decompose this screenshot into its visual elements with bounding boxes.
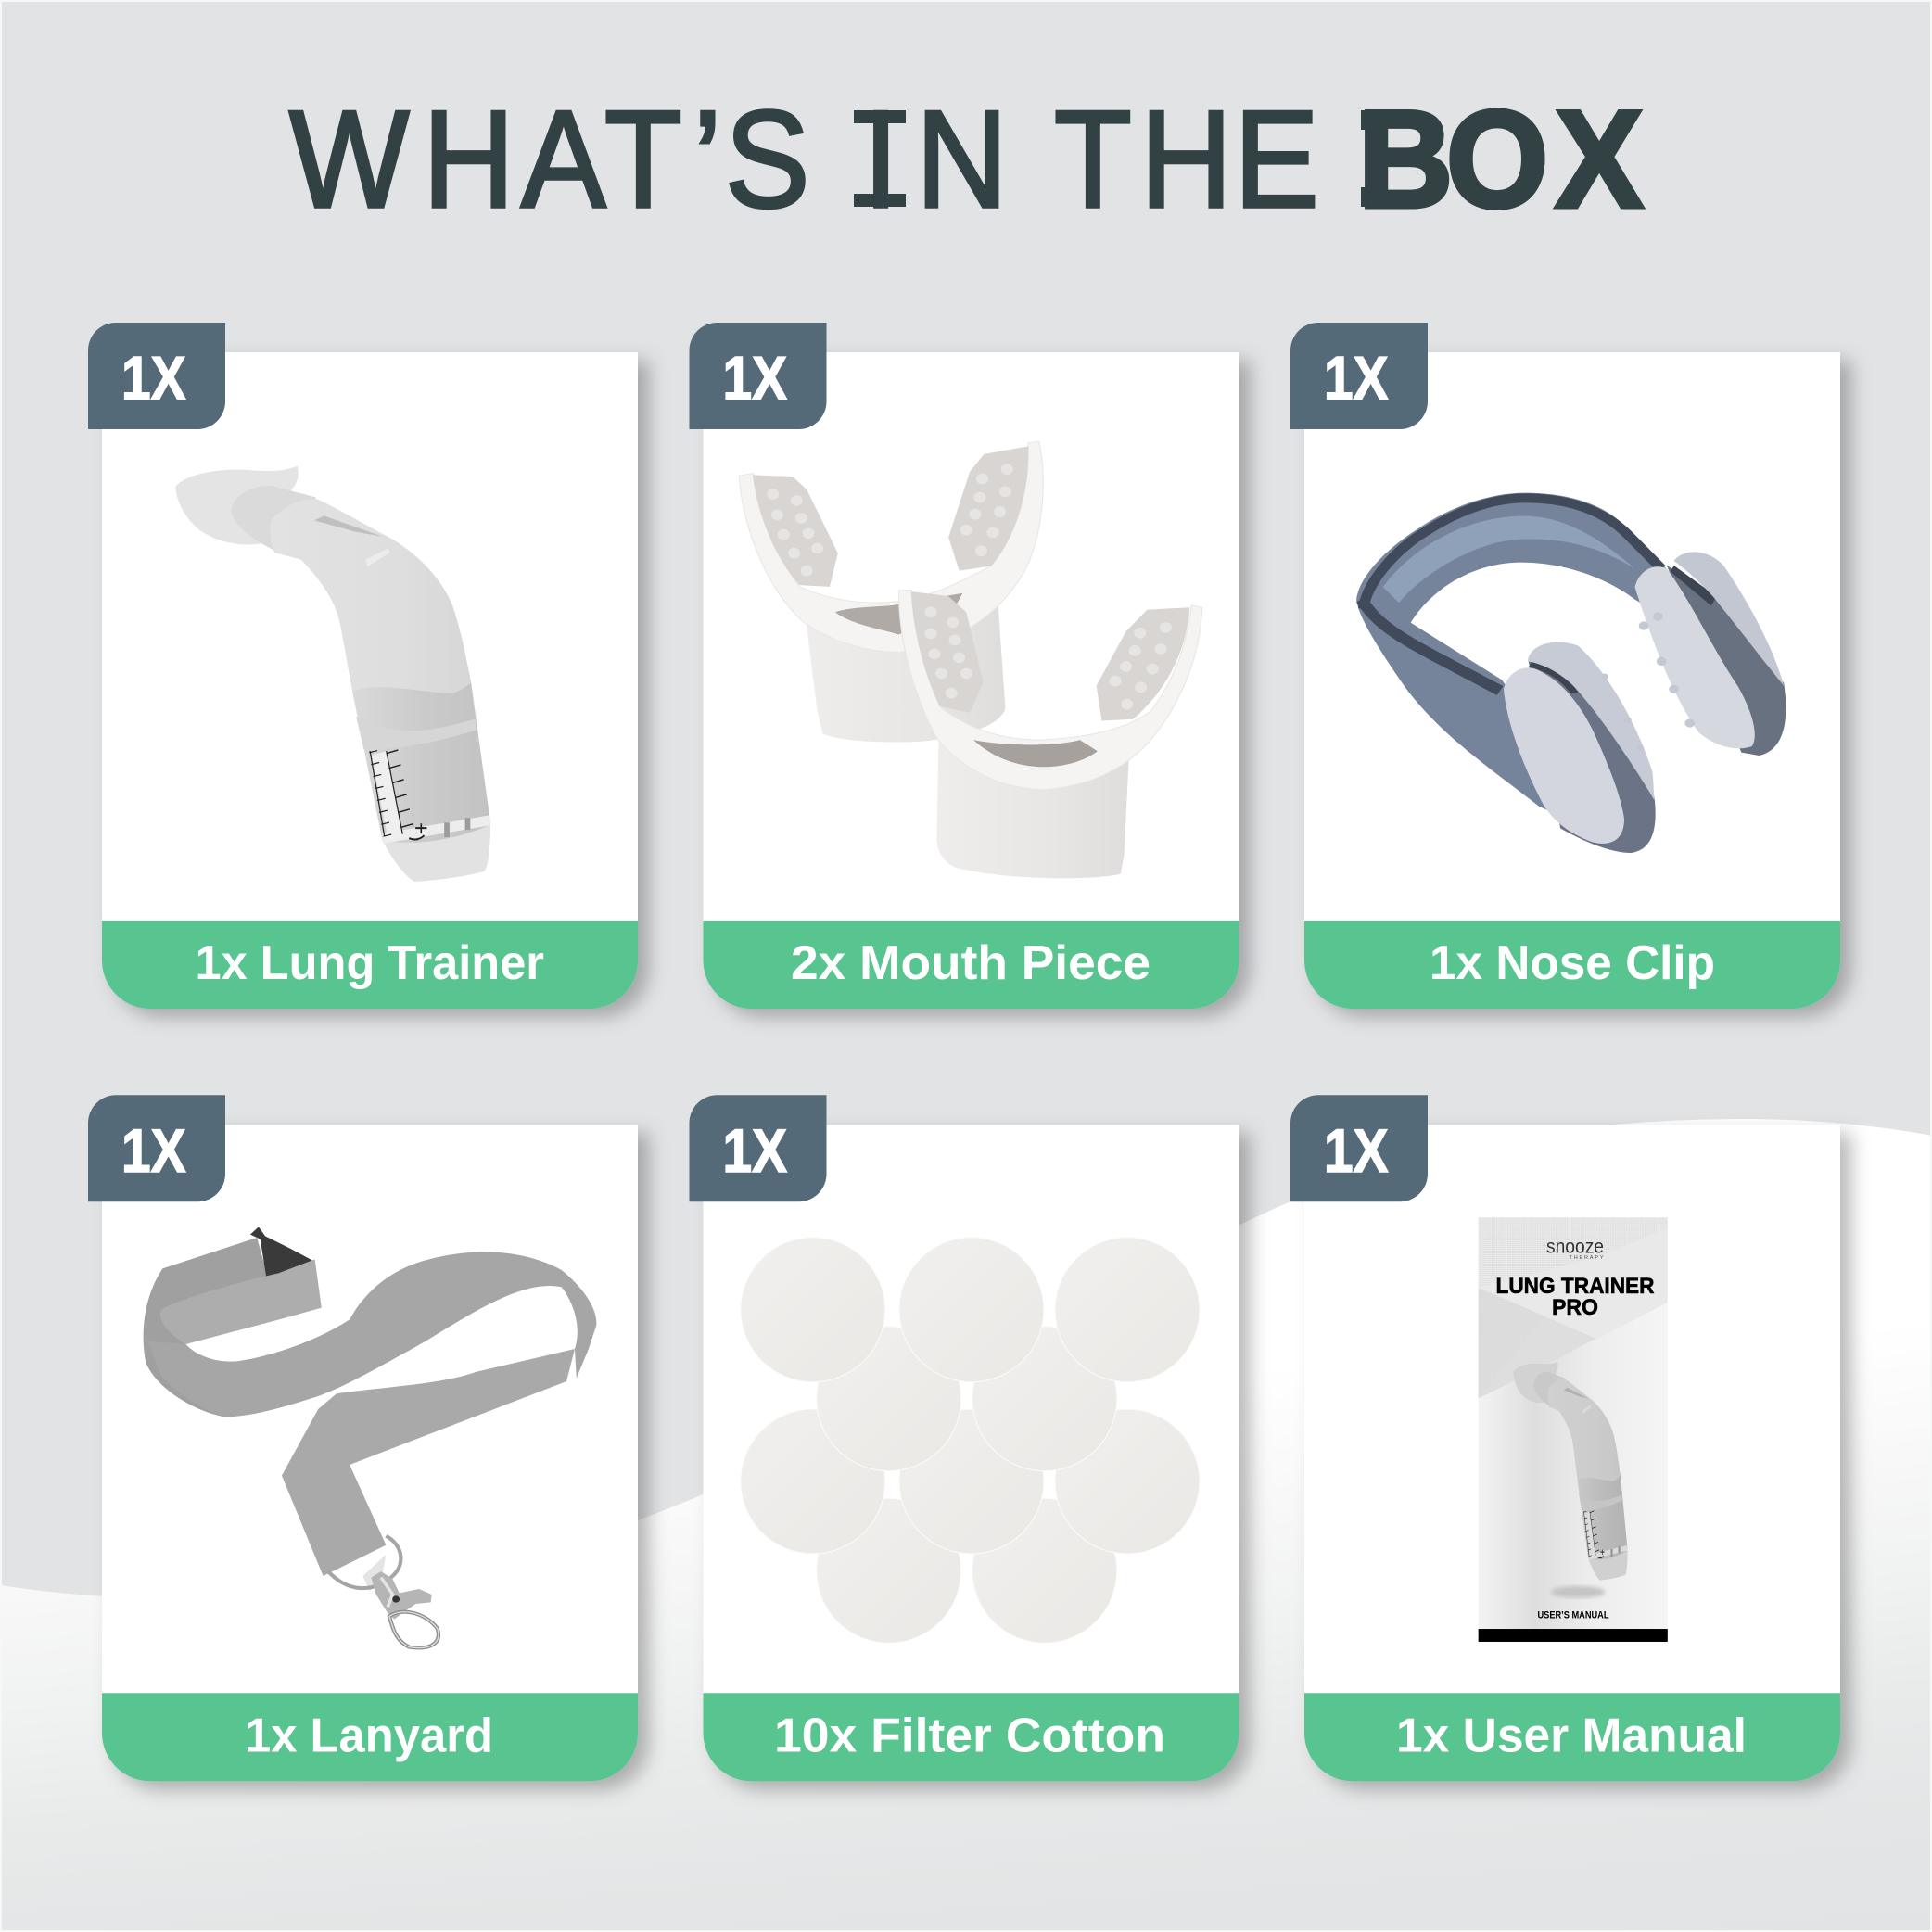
product: lanyard (144, 1227, 596, 1647)
quantity badge: 1X (121, 1116, 185, 1185)
quantity badge (1290, 323, 1428, 429)
title (289, 82, 1643, 236)
product: ten filter discs (741, 1238, 1200, 1643)
label: 10x Filter Cotton (774, 1710, 1165, 1763)
background wave (0, 1119, 1932, 1932)
product: manual booklet (1479, 1217, 1668, 1642)
title: THE (1054, 83, 1319, 236)
card body (1304, 1125, 1840, 1781)
title: IN (863, 83, 1008, 236)
product: manual booklet: snooze (1546, 1237, 1604, 1257)
label: 1x Lung Trainer (195, 936, 544, 990)
quantity badge: 1X (723, 1116, 787, 1185)
card body (102, 352, 638, 1009)
product: nose clip (1356, 493, 1786, 853)
quantity badge (88, 1095, 225, 1201)
quantity badge: 1X (121, 343, 185, 412)
product: manual booklet: PRO (1552, 1295, 1598, 1320)
panel: user manual (1290, 1095, 1840, 1781)
title: BOX (1358, 82, 1643, 236)
quantity badge: 1X (723, 343, 787, 412)
panel: mouth piece (690, 323, 1239, 1009)
label: 1x Nose Clip (1430, 936, 1715, 990)
quantity badge: 1X (1324, 1116, 1389, 1185)
product: manual booklet: USER’S MANUAL (1537, 1609, 1609, 1621)
quantity badge (88, 323, 225, 429)
card body (703, 1125, 1239, 1781)
card body (1304, 352, 1840, 1009)
product: two mouth pieces (739, 441, 1202, 878)
title: WHAT’S (289, 83, 809, 236)
card body (703, 352, 1239, 1009)
label: 1x Lanyard (245, 1710, 493, 1763)
quantity badge (1290, 1095, 1428, 1201)
product: manual booklet: LUNG TRAINER (1496, 1274, 1654, 1299)
product: lung trainer (175, 466, 490, 882)
label: 1x User Manual (1396, 1710, 1747, 1763)
panel: lanyard (88, 1095, 638, 1781)
quantity badge (690, 1095, 827, 1201)
label: 2x Mouth Piece (791, 936, 1150, 990)
card body (102, 1125, 638, 1781)
panel: nose clip (1290, 323, 1840, 1009)
panel: lung trainer (88, 323, 638, 1009)
product: manual booklet: THERAPY (1569, 1255, 1604, 1261)
quantity badge: 1X (1324, 343, 1389, 412)
quantity badge (690, 323, 827, 429)
panel: filter cotton (690, 1095, 1239, 1781)
